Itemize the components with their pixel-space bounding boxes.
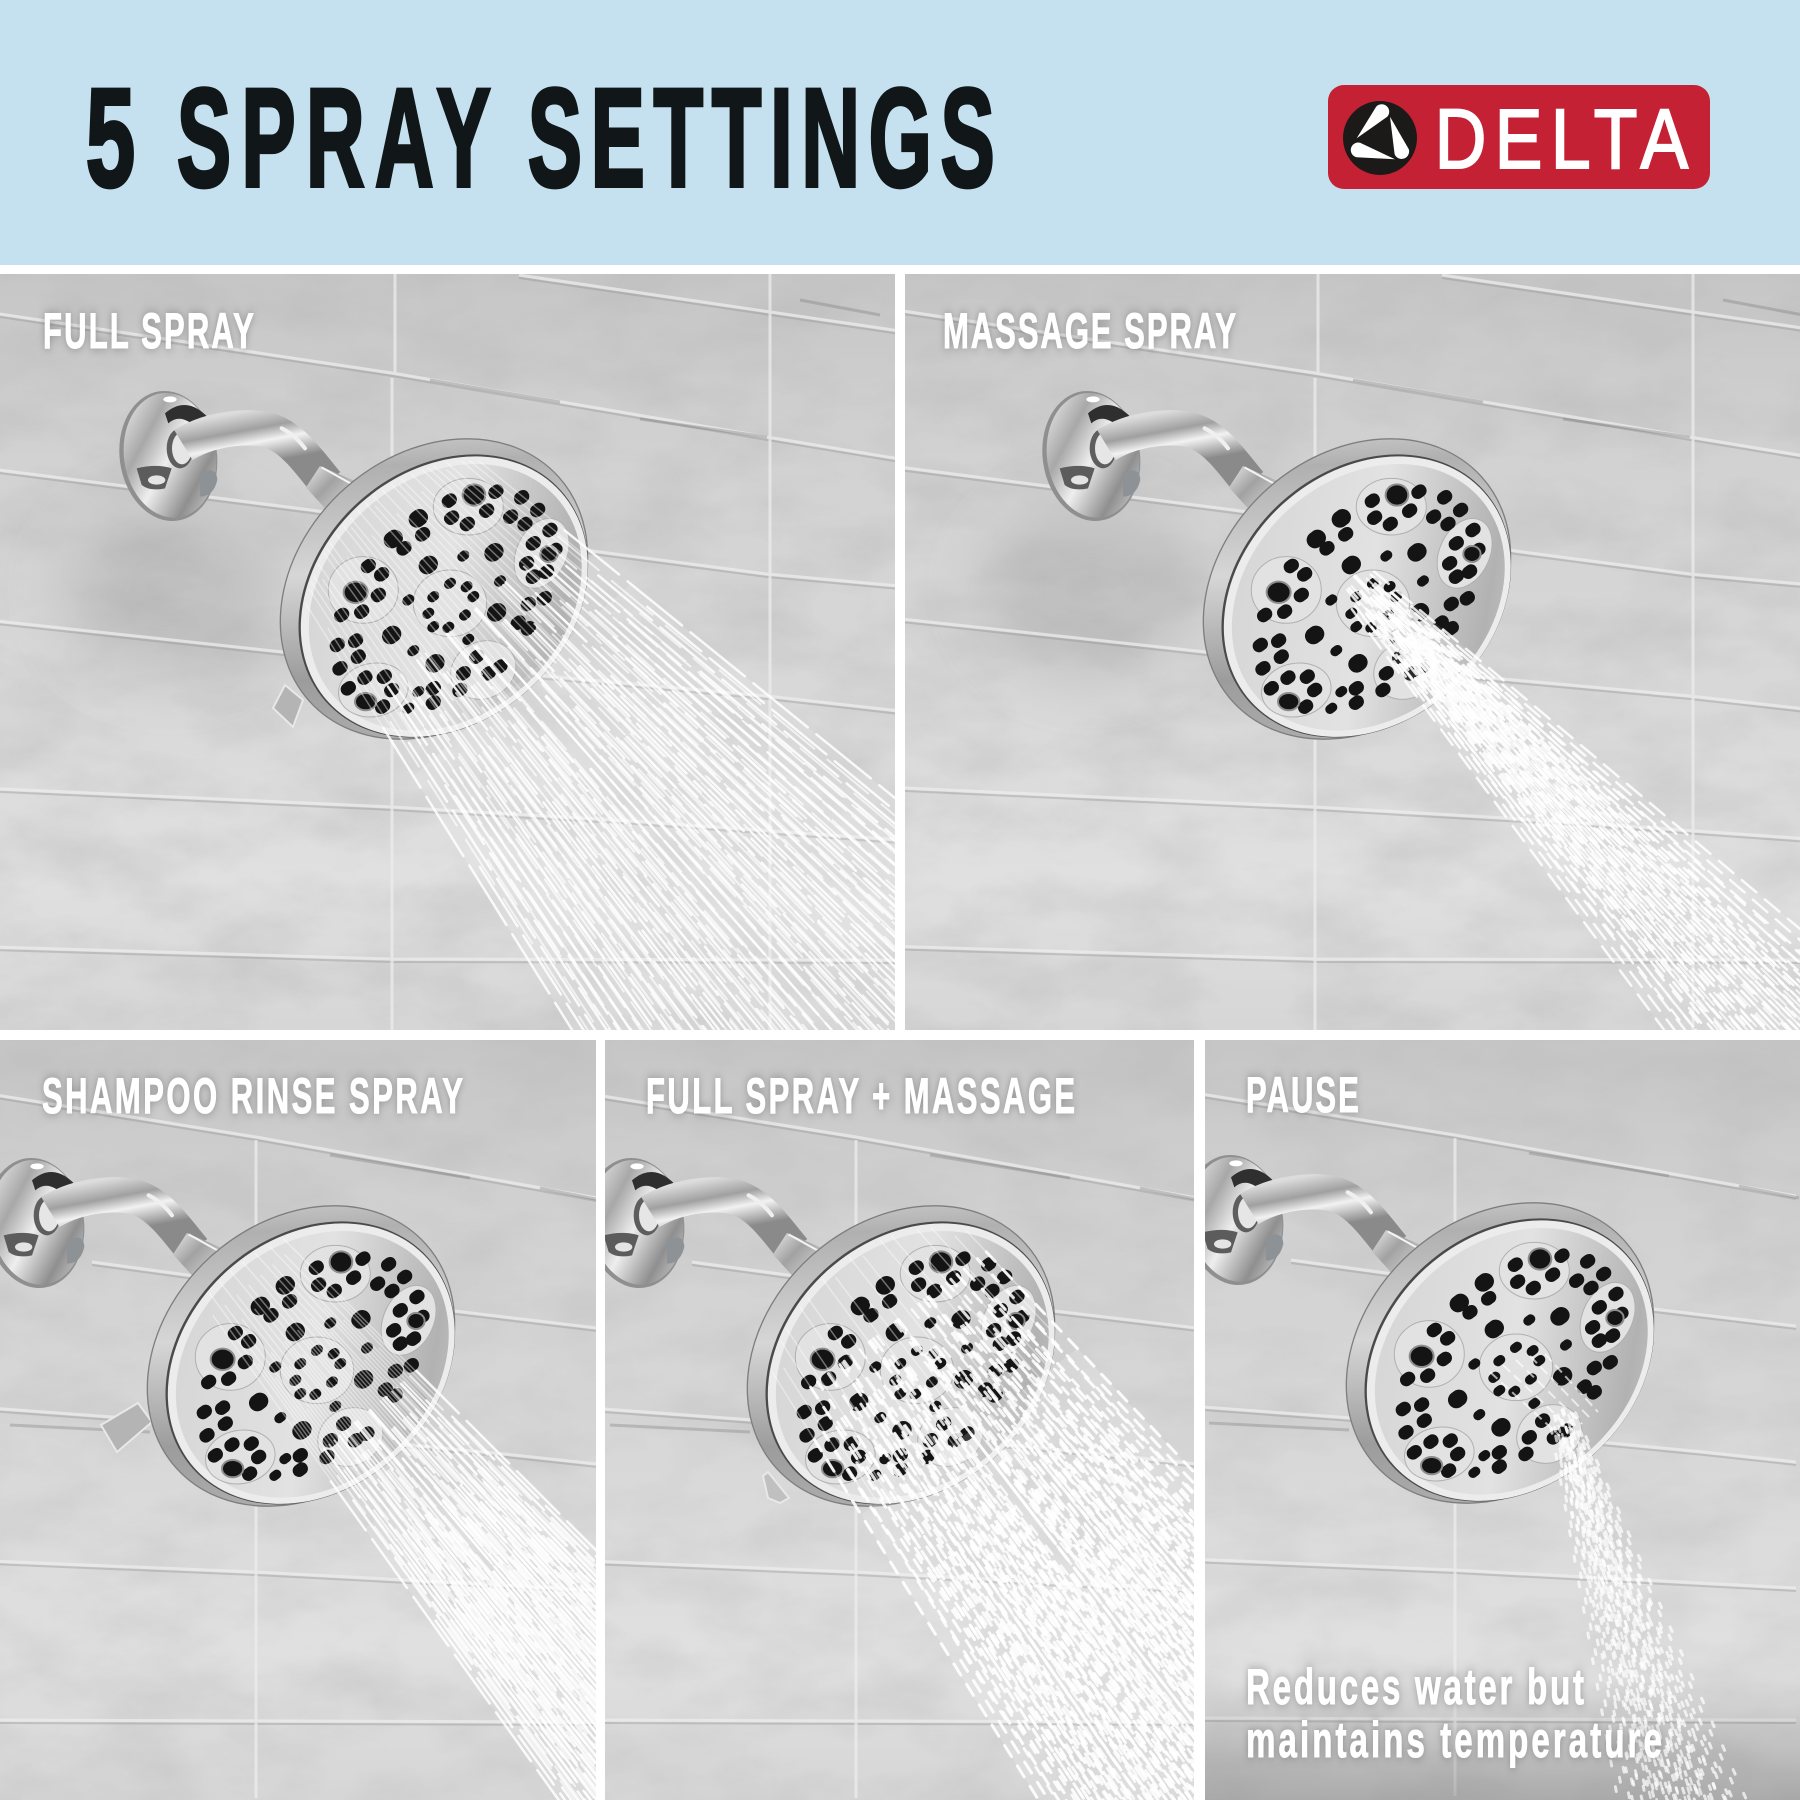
- water on face: [1490, 1354, 1598, 1436]
- lever: [763, 1472, 789, 1503]
- title: 5: [86, 60, 135, 217]
- water spray: [714, 1193, 1654, 1800]
- lever: [101, 1403, 152, 1452]
- title: SETTINGS: [528, 60, 995, 217]
- logo: Delta: [1328, 85, 1710, 189]
- lever: [273, 685, 303, 727]
- caption: maintains temperature: [1246, 1712, 1662, 1768]
- caption: Reduces water but: [1246, 1659, 1584, 1715]
- shower head: [578, 1144, 1115, 1568]
- label: SHAMPOO RINSE SPRAY: [42, 1067, 463, 1124]
- label: MASSAGE SPRAY: [943, 302, 1236, 359]
- label: FULL SPRAY + MASSAGE: [646, 1067, 1075, 1124]
- water on face: [212, 1242, 436, 1487]
- water spray: [291, 462, 1050, 1234]
- header band: [0, 0, 1800, 265]
- title: SPRAY: [177, 60, 491, 217]
- shower head: [0, 1144, 515, 1568]
- caption: [1246, 1659, 1662, 1768]
- label: FULL SPRAY: [43, 302, 254, 359]
- water spray: [274, 1337, 869, 1800]
- water spray: [1280, 510, 1800, 1147]
- panel: pause: [1205, 1040, 1800, 1800]
- panel: massage spray: [905, 274, 1800, 1030]
- label: PAUSE: [1246, 1066, 1359, 1123]
- panel: full spray + massage: [605, 1040, 1194, 1800]
- shower head: [1034, 377, 1571, 801]
- water on face: [776, 1231, 1049, 1498]
- water on face: [310, 464, 582, 730]
- title: [86, 60, 995, 217]
- water droplets: [1498, 1391, 1754, 1800]
- shower head: [1177, 1141, 1714, 1565]
- wordmark: DELTA: [1435, 91, 1688, 186]
- panel: shampoo rinse spray: [0, 1040, 596, 1800]
- panel: full spray: [0, 274, 895, 1030]
- shower head: [111, 377, 648, 801]
- icon: Delta triangle mark: [1343, 101, 1417, 175]
